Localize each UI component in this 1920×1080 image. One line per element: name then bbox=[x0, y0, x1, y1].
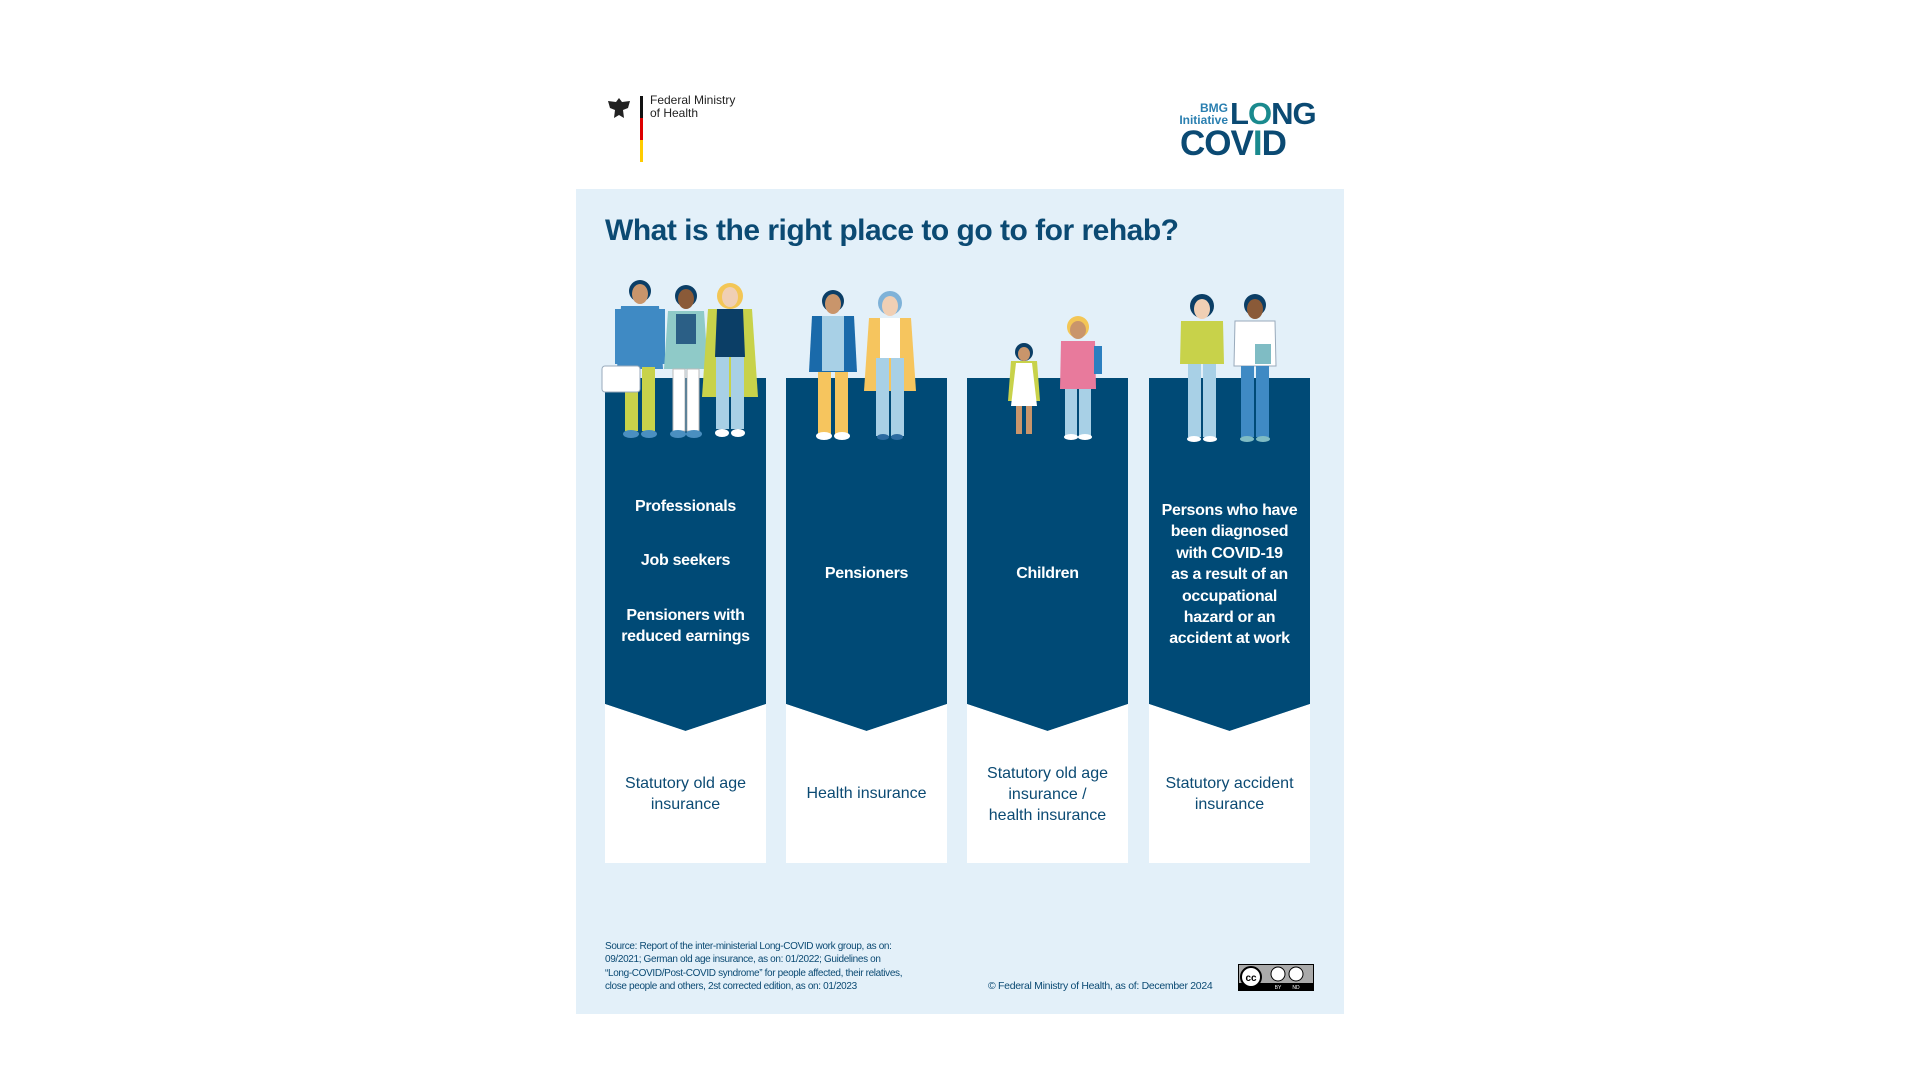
column 3: children: Statutory old age bbox=[987, 765, 1108, 782]
column 2: health insurance bbox=[786, 378, 947, 863]
column 2: health insurance: Pensioners bbox=[825, 565, 908, 582]
title: What is the right place to go to for rehab? bbox=[605, 214, 1179, 247]
people group 2 bbox=[809, 290, 916, 440]
footer: source text: close people and others, 2st corrected edition, as on: 01/2023 bbox=[605, 981, 857, 992]
column 4: accident insurance: insurance bbox=[1195, 796, 1264, 813]
column 4: accident insurance: accident at work bbox=[1169, 630, 1290, 647]
column 3: children: Children bbox=[1016, 565, 1079, 582]
column 2: health insurance: Health insurance bbox=[806, 785, 927, 802]
column 4: accident insurance: with COVID-19 bbox=[1176, 545, 1283, 562]
column 4: accident insurance: hazard or an bbox=[1184, 609, 1275, 626]
logo: Federal Ministry of Health bbox=[608, 93, 736, 162]
icon: CC BY-ND badge: BY bbox=[1275, 985, 1282, 991]
footer: source text: 09/2021; German old age insurance, as on: 01/2022; Guidelines on bbox=[605, 954, 881, 965]
column 1: statutory old age insurance bbox=[605, 378, 766, 863]
logo: BMG Initiative Long COVID bbox=[1179, 96, 1316, 163]
icon: CC BY-ND badge: ND bbox=[1292, 985, 1300, 991]
footer: source text: Source: Report of the inter-ministerial Long-COVID work group, as on: bbox=[605, 941, 892, 952]
people group 3 bbox=[1008, 316, 1102, 440]
column 4: accident insurance: as a result of an bbox=[1171, 566, 1288, 583]
panel: main bbox=[576, 189, 1344, 1014]
logo: BMG Initiative Long COVID: LONG bbox=[1230, 96, 1316, 131]
text: ministry name bbox=[650, 93, 736, 120]
column 4: accident insurance: occupational bbox=[1182, 588, 1277, 605]
footer: copyright: © Federal Ministry of Health, as of: December 2024 bbox=[988, 980, 1212, 992]
column 3: children bbox=[967, 378, 1128, 863]
footer: source text: “Long-COVID/Post-COVID syndrome” for people affected, their relatives, bbox=[605, 968, 902, 979]
column 3: children: insurance / bbox=[1008, 786, 1087, 803]
column 1: statutory old age insurance: Job seekers bbox=[641, 552, 730, 569]
people group 1 bbox=[602, 280, 758, 438]
logo: BMG Initiative Long COVID: Initiative bbox=[1179, 113, 1228, 127]
icon: CC BY-ND badge: cc bbox=[1245, 973, 1257, 984]
column 1: statutory old age insurance: Pensioners with bbox=[626, 607, 745, 624]
column 4: accident insurance: Statutory accident bbox=[1165, 775, 1294, 792]
column 4: accident insurance: been diagnosed bbox=[1171, 523, 1288, 540]
text: ministry name: Federal Ministry bbox=[650, 93, 735, 107]
text: insurer: Statutory old age bbox=[625, 775, 746, 792]
footer: source text bbox=[605, 941, 902, 992]
column 3: children: health insurance bbox=[989, 807, 1106, 824]
column 4: accident insurance: Persons who have bbox=[1162, 502, 1297, 519]
text: ministry name: of Health bbox=[650, 106, 698, 120]
logo: BMG Initiative Long COVID: BMG bbox=[1200, 101, 1228, 115]
icon: CC BY-ND badge bbox=[1238, 964, 1314, 991]
column 4: accident insurance bbox=[1149, 378, 1310, 863]
column 1: statutory old age insurance: reduced earnings bbox=[621, 628, 750, 645]
text: insurer: insurance bbox=[651, 796, 720, 813]
text: insurer bbox=[625, 775, 746, 813]
people group 4 bbox=[1180, 294, 1276, 442]
text: target groups: Professionals bbox=[635, 498, 736, 515]
icon: eagle bbox=[608, 98, 630, 118]
logo: BMG Initiative Long COVID: COVID bbox=[1180, 124, 1286, 163]
